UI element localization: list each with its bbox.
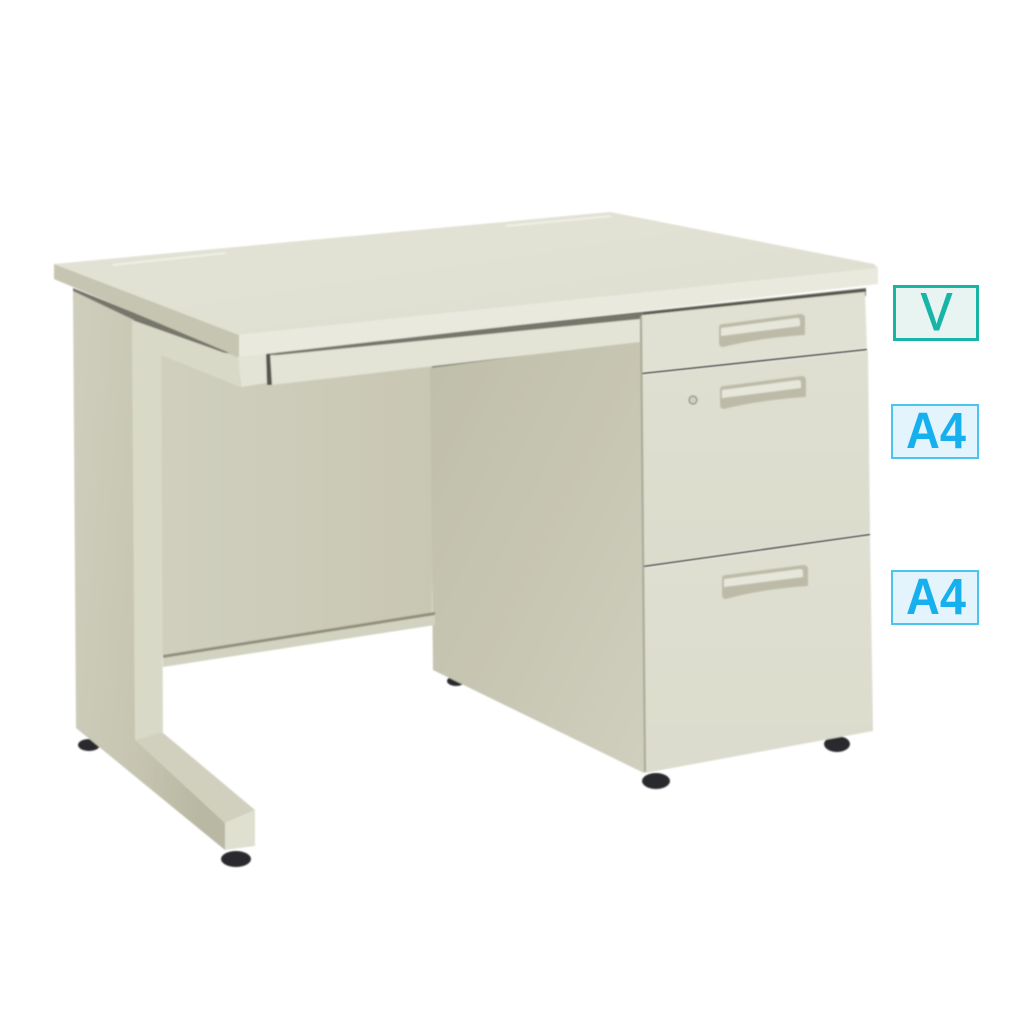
left leg side panel xyxy=(73,291,225,850)
middle drawer front xyxy=(642,351,870,565)
pull-out tray xyxy=(266,319,640,385)
handle: top drawer xyxy=(719,314,805,347)
handle: bottom drawer xyxy=(722,565,808,599)
badge: V: V xyxy=(921,282,953,342)
pedestal side panel xyxy=(430,340,644,773)
handle: middle drawer xyxy=(720,376,806,409)
drawer handles xyxy=(719,314,808,599)
badge: A4 lower xyxy=(892,569,978,625)
badge: A4 lower: A4 xyxy=(906,569,966,625)
drawer gap lines xyxy=(642,290,870,566)
cable slots xyxy=(112,215,612,266)
desk illustration xyxy=(54,212,878,867)
badge: V xyxy=(894,282,978,342)
badge: A4 upper xyxy=(892,403,978,459)
apron corner block xyxy=(238,353,267,387)
lower crossbar xyxy=(163,612,435,667)
desktop top surface xyxy=(54,212,878,335)
top drawer front xyxy=(642,292,867,372)
left leg front post xyxy=(132,342,163,740)
desktop left edge xyxy=(54,264,239,357)
leg foot end face xyxy=(225,810,255,850)
badge: A4 upper: A4 xyxy=(906,403,966,459)
drawer lock xyxy=(689,396,697,404)
underside shadow backing xyxy=(73,288,866,388)
desktop front edge xyxy=(239,268,878,357)
bottom drawer front xyxy=(644,536,873,773)
apron side under top xyxy=(132,320,240,387)
back modesty panel xyxy=(160,350,432,656)
leg foot top face xyxy=(135,732,255,823)
adjuster feet xyxy=(78,676,850,867)
